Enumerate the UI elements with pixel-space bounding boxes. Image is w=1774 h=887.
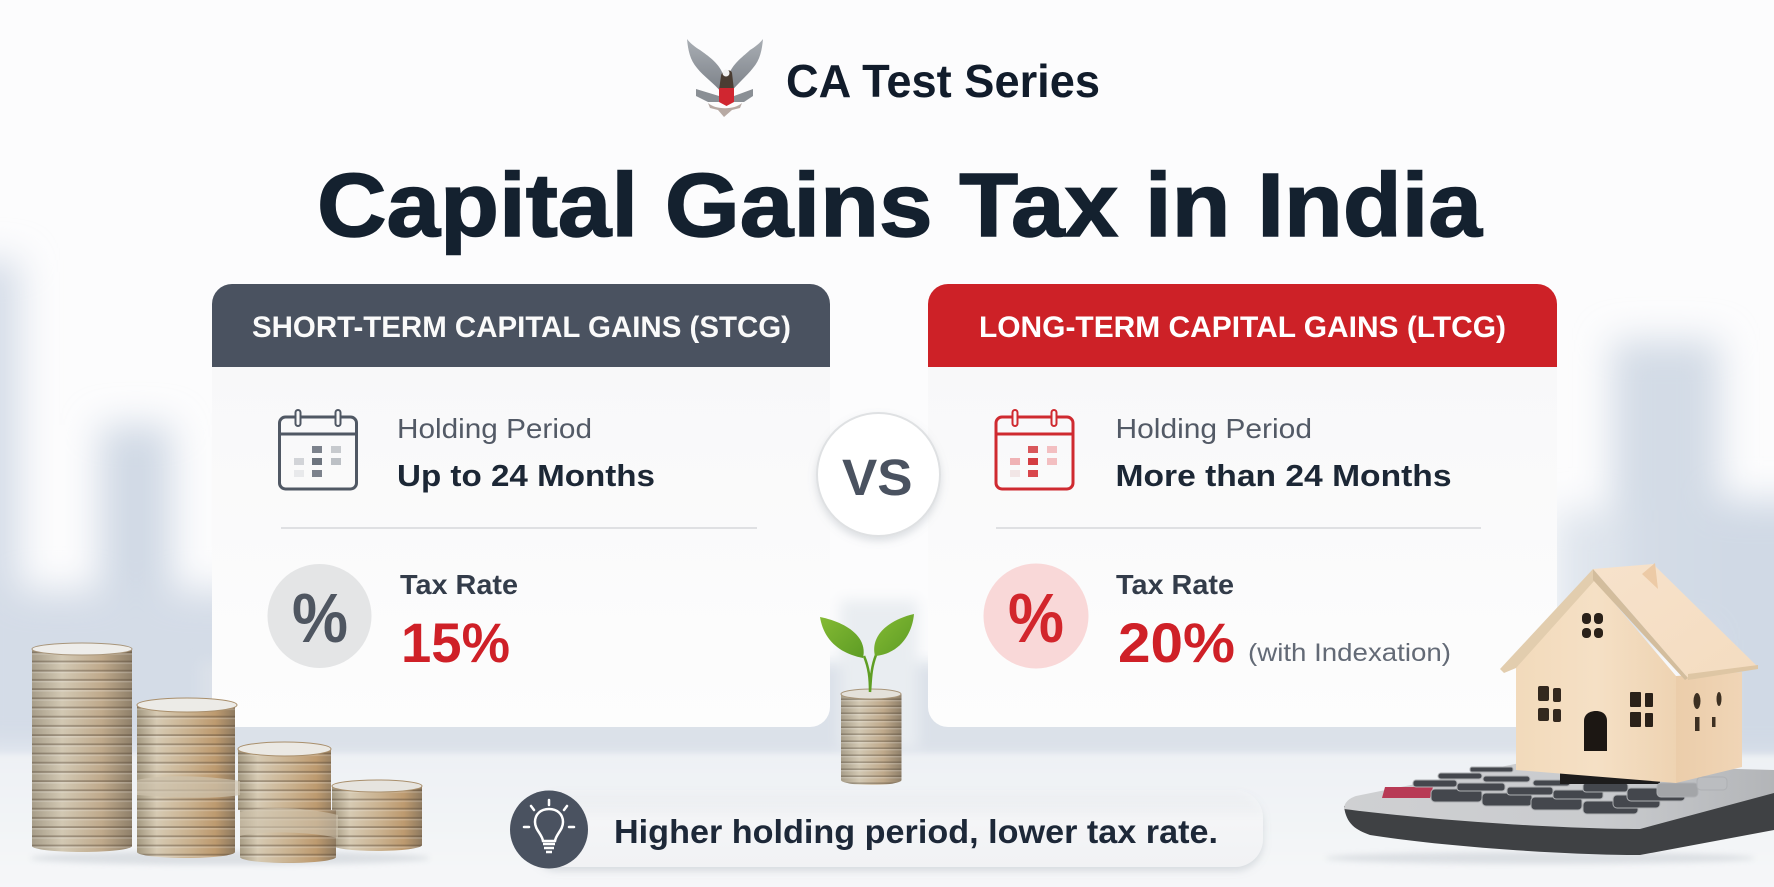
icon: left wing [687, 39, 723, 92]
left windows [1538, 686, 1561, 722]
wooden house [1500, 563, 1758, 783]
tax rate value: 20% [1118, 611, 1235, 674]
panel: long-term capital gains [928, 284, 1557, 727]
card header [212, 284, 830, 367]
icon: calendar [280, 410, 356, 489]
front eave left [1500, 569, 1595, 673]
calculator keys [1413, 767, 1727, 814]
house front wall [1516, 578, 1676, 783]
card header [928, 284, 1557, 367]
icon: percent badge: % [1008, 579, 1064, 657]
icon: light bulb [510, 790, 588, 868]
side windows [1694, 692, 1722, 731]
takeaway text: Higher holding period, lower tax rate. [614, 813, 1218, 850]
door [1584, 711, 1607, 751]
tax rate value: 15% [401, 611, 510, 674]
icon: bottom scroll [708, 103, 742, 117]
seedling on coin stack [820, 614, 914, 785]
holding period label: Holding Period [397, 413, 592, 444]
header label: SHORT-TERM CAPITAL GAINS (STCG) [252, 311, 791, 344]
icon: percent badge [984, 564, 1088, 668]
card body [212, 360, 830, 727]
holding period label: Holding Period [1116, 413, 1312, 444]
stem [864, 655, 876, 692]
logo: winged emblem [687, 39, 763, 117]
header label: LONG-TERM CAPITAL GAINS (LTCG) [979, 311, 1506, 344]
panel: short-term capital gains [212, 284, 830, 727]
eave right edge [1688, 665, 1758, 680]
icon: left ribbon [696, 89, 720, 102]
brand name: CA Test Series [786, 55, 1100, 107]
red key [1382, 787, 1433, 798]
icon: red shield [719, 88, 734, 106]
small coin stack [841, 689, 902, 785]
tax rate label: Tax Rate [400, 569, 518, 600]
card body [928, 360, 1557, 727]
pill background [530, 790, 1263, 867]
top windows [1582, 613, 1603, 638]
coin stack 2 [137, 698, 240, 858]
coin stack 1 [32, 643, 132, 852]
coin stack 3 [238, 742, 338, 863]
house side wall [1676, 672, 1742, 783]
VS badge: VS [842, 449, 912, 506]
calculator [1325, 763, 1774, 864]
calculator base [1344, 788, 1774, 855]
coin stack 4 [332, 780, 422, 851]
holding period value: More than 24 Months [1116, 458, 1452, 493]
icon: right wing [729, 39, 763, 92]
icon: calendar [996, 410, 1073, 489]
VS badge [817, 413, 940, 536]
right leaf [874, 614, 914, 656]
holding period value: Up to 24 Months [397, 458, 655, 493]
chimney [1642, 563, 1658, 589]
calculator top surface [1344, 763, 1774, 829]
title: Capital Gains Tax in India [317, 156, 1483, 256]
left leaf [820, 617, 864, 658]
icon: percent badge: % [292, 579, 348, 657]
indexation note: (with Indexation) [1248, 639, 1451, 667]
icon: percent badge [268, 564, 372, 668]
front eave right [1593, 569, 1688, 680]
right windows [1630, 692, 1653, 727]
icon: eagle body [719, 70, 734, 90]
icon: head [722, 70, 730, 76]
house roof [1593, 564, 1758, 678]
tax rate label: Tax Rate [1116, 569, 1234, 600]
icon: right ribbon [733, 89, 753, 102]
takeaway bar [510, 790, 1263, 868]
coin stacks [30, 643, 430, 865]
